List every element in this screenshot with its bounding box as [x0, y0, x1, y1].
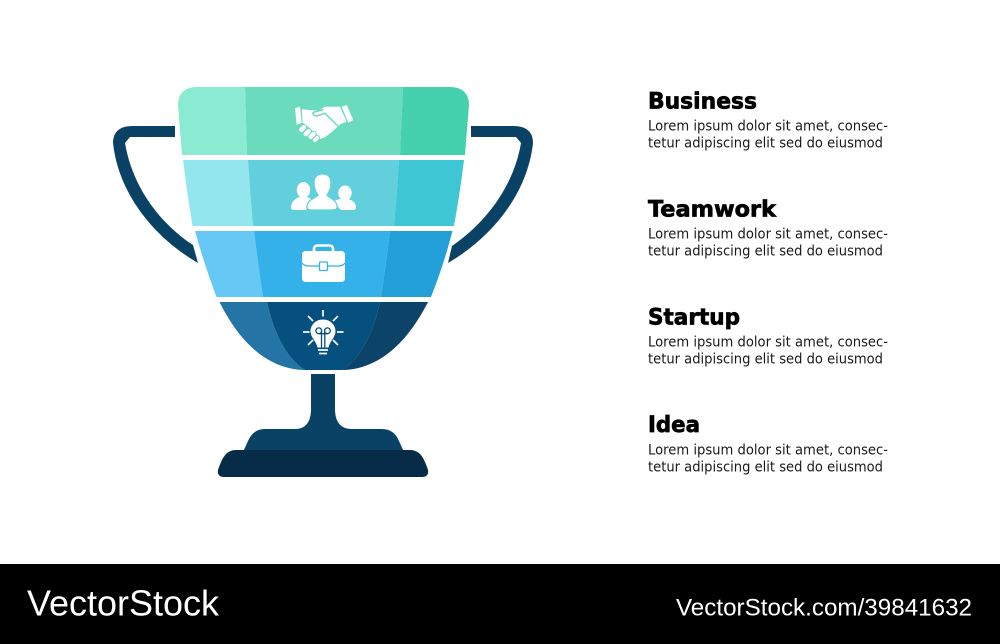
text block: startup	[648, 306, 888, 368]
footer bar	[0, 564, 1000, 644]
trophy base	[218, 450, 428, 477]
band: startup	[195, 231, 452, 297]
footer logo: VectorStock	[27, 582, 220, 624]
band: business	[178, 87, 469, 155]
text block: startup: Startup	[648, 306, 740, 330]
right handle	[448, 126, 533, 263]
trophy stem	[243, 374, 404, 452]
icon: briefcase	[302, 246, 345, 282]
left handle	[113, 126, 198, 263]
text block: startup: Lorem ipsum dolor sit amet, consec-	[648, 334, 888, 350]
text block: business: tetur adipiscing elit sed do eiusmod	[648, 136, 883, 152]
text block: teamwork	[648, 198, 888, 260]
text block: teamwork: Teamwork	[648, 198, 777, 222]
text block: business: Lorem ipsum dolor sit amet, consec-	[648, 118, 888, 134]
text block: idea	[648, 413, 888, 476]
icon: team	[291, 174, 356, 210]
text block: idea: Lorem ipsum dolor sit amet, consec-	[648, 442, 888, 458]
icon: handshake	[295, 105, 353, 144]
band: idea	[220, 302, 428, 370]
text block: startup: tetur adipiscing elit sed do eiusmod	[648, 352, 883, 368]
text block: idea: tetur adipiscing elit sed do eiusmod	[648, 460, 883, 476]
text block: teamwork: tetur adipiscing elit sed do eiusmod	[648, 244, 883, 260]
text block: teamwork: Lorem ipsum dolor sit amet, consec-	[648, 226, 888, 242]
text block: business	[648, 90, 888, 152]
icon: light bulb	[303, 310, 344, 354]
trophy	[113, 87, 533, 477]
text block: idea: Idea	[648, 413, 700, 438]
text block: business: Business	[648, 90, 757, 114]
band: teamwork	[183, 160, 464, 226]
footer url: VectorStock.com/39841632	[676, 594, 972, 622]
